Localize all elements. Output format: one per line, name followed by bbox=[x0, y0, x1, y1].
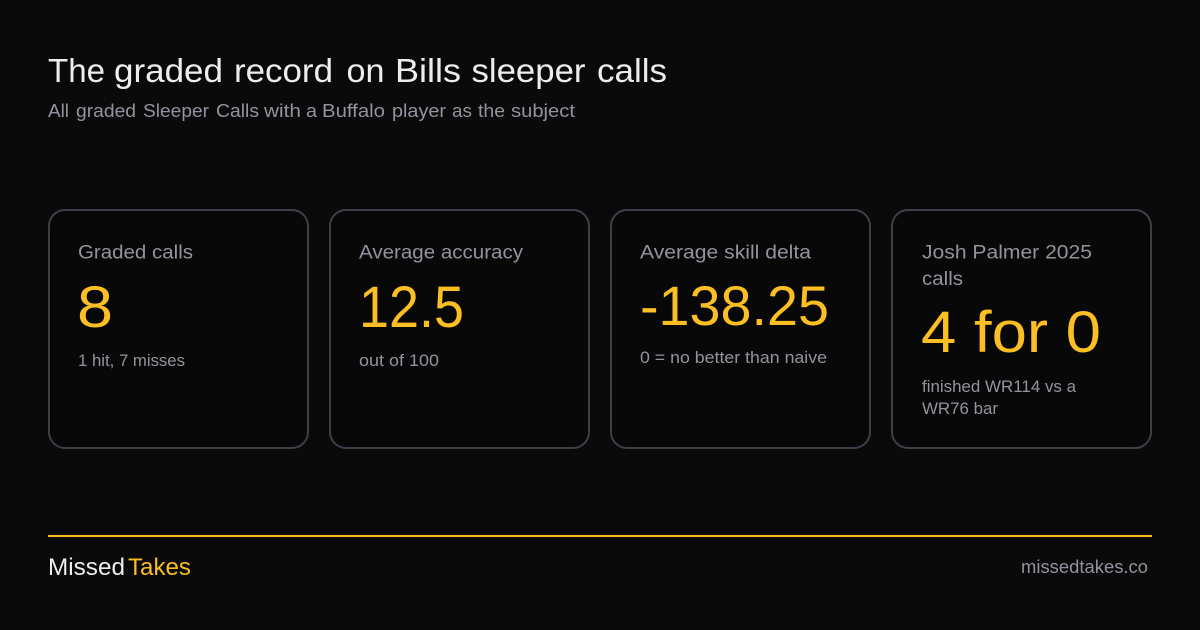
subtitle: All bbox=[48, 100, 69, 121]
title: record bbox=[234, 52, 333, 89]
subtitle: Buffalo bbox=[322, 100, 385, 121]
subtitle: Sleeper bbox=[143, 100, 209, 121]
panel: graded calls bbox=[49, 210, 308, 448]
note: naive baseline: 0 = no better than naive bbox=[640, 349, 827, 367]
note: finish versus bar bbox=[922, 378, 1077, 418]
subtitle: subject bbox=[511, 100, 575, 121]
subtitle: with bbox=[263, 100, 301, 121]
value: 12.5: 12.5 bbox=[359, 275, 464, 340]
label: average skill delta: Average skill delta bbox=[640, 242, 811, 264]
brand logo: Missed bbox=[48, 554, 125, 581]
panel: average skill delta bbox=[611, 210, 870, 448]
label: josh palmer 2025 calls bbox=[922, 242, 1092, 290]
value: 8: 8 bbox=[77, 275, 113, 340]
footer rule bbox=[48, 535, 1152, 537]
subtitle: as bbox=[452, 100, 472, 121]
value: -138.25: -138.25 bbox=[640, 274, 829, 337]
title: sleeper bbox=[472, 52, 586, 89]
title: on bbox=[346, 52, 384, 89]
title: calls bbox=[597, 52, 667, 89]
label: average accuracy: Average accuracy bbox=[359, 242, 524, 264]
note: finish versus bar: WR76 bar bbox=[922, 400, 999, 418]
value: 4 for 0: 4 for 0 bbox=[921, 300, 1101, 365]
label: josh palmer 2025 calls: calls bbox=[922, 269, 963, 290]
title bbox=[48, 52, 667, 89]
subtitle bbox=[48, 100, 575, 121]
note: hits and misses: 1 hit, 7 misses bbox=[78, 352, 185, 370]
subtitle: player bbox=[392, 100, 446, 121]
subtitle: graded bbox=[76, 100, 136, 121]
title: The bbox=[48, 52, 105, 89]
website url: missedtakes.co bbox=[1021, 557, 1148, 577]
subtitle: a bbox=[306, 100, 318, 121]
label: josh palmer 2025 calls: Josh Palmer 2025 bbox=[922, 242, 1092, 264]
title: Bills bbox=[395, 52, 461, 89]
panel: josh palmer 2025 calls bbox=[892, 210, 1151, 448]
subtitle: the bbox=[478, 100, 505, 121]
label: graded calls: Graded calls bbox=[78, 242, 193, 264]
brand logo: Takes bbox=[128, 554, 191, 581]
panel: average accuracy bbox=[330, 210, 589, 448]
note: out of 100: out of 100 bbox=[359, 352, 439, 370]
note: finish versus bar: finished WR114 vs a bbox=[922, 378, 1077, 396]
title: graded bbox=[114, 52, 223, 89]
subtitle: Calls bbox=[216, 100, 259, 121]
brand logo bbox=[48, 554, 191, 581]
